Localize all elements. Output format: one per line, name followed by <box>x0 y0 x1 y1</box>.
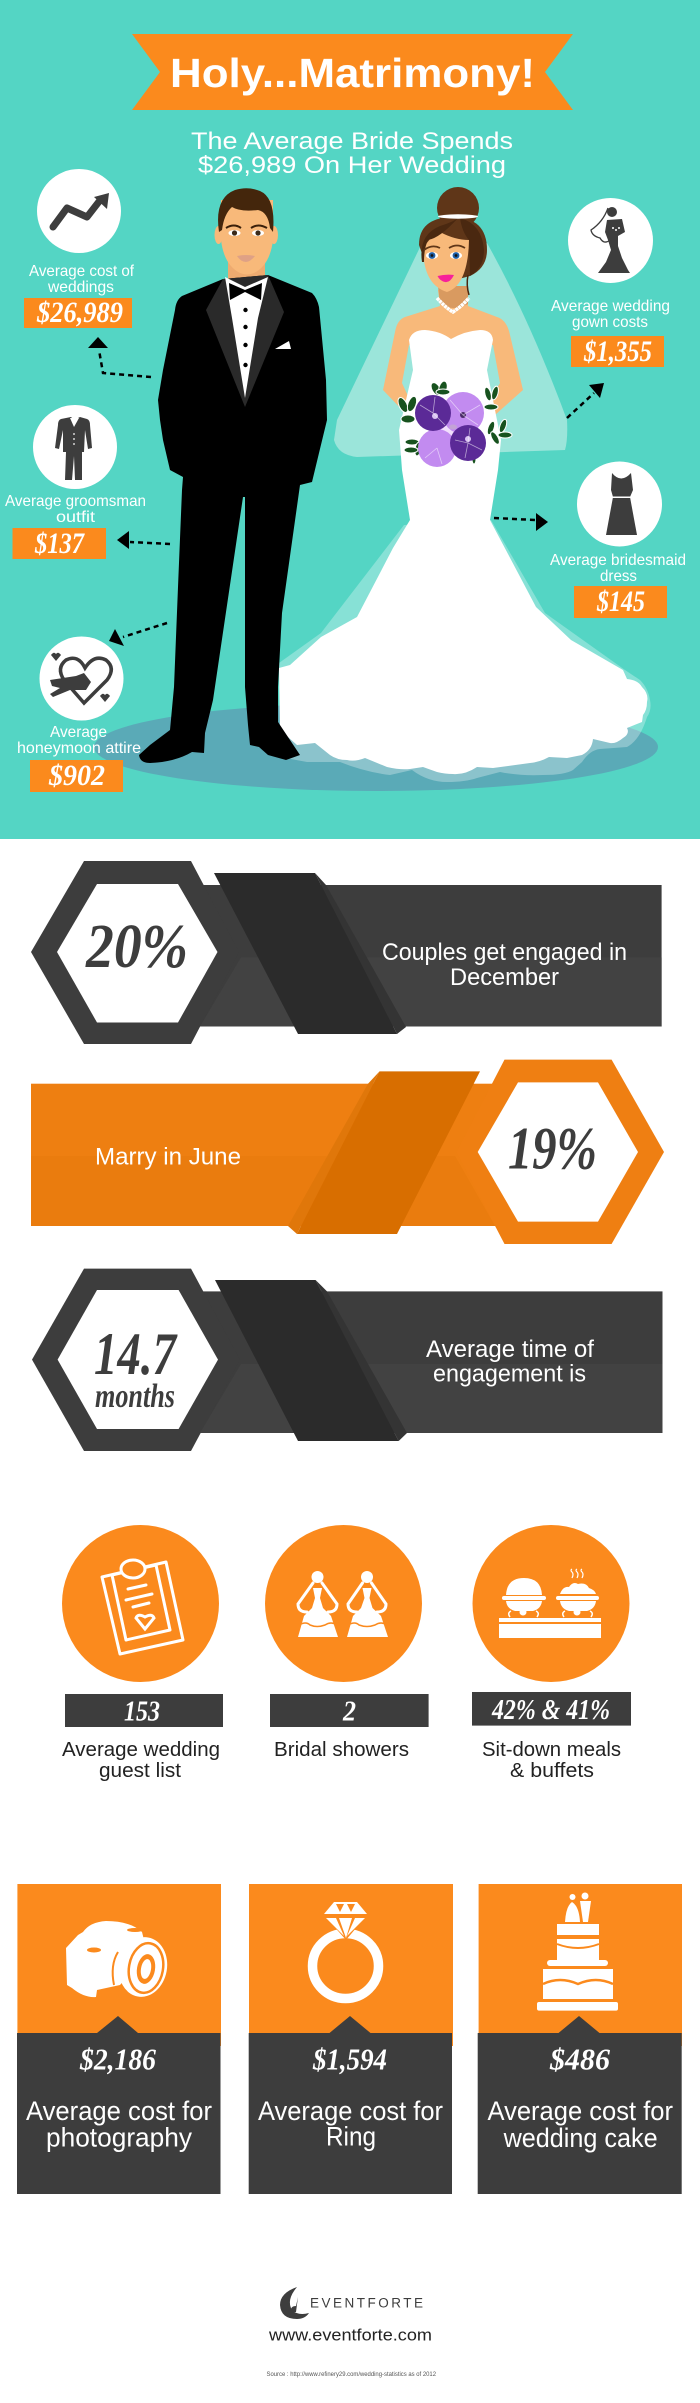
stat: meals and buffets: Sit-down meals <box>482 1739 621 1761</box>
groom lapels <box>206 275 284 407</box>
stat: honeymoon attire <box>17 636 141 792</box>
icon: wedding cake <box>537 1892 618 2011</box>
stat: groomsman outfit: $137 <box>34 527 85 560</box>
stat: guest list: 153 <box>124 1697 160 1728</box>
subtitle: The Average Bride Spends <box>191 128 513 155</box>
card: ring: Ring <box>326 2122 376 2152</box>
icon: diamond ring <box>312 1902 378 1998</box>
card: wedding cake: Average cost for <box>488 2096 673 2126</box>
banner: 19% marry in June: Marry in June <box>95 1144 241 1170</box>
bride necklace <box>437 298 469 312</box>
stat: honeymoon attire: honeymoon attire <box>17 740 141 757</box>
stat: groomsman outfit <box>5 405 146 560</box>
stat: wedding gown: gown costs <box>572 314 648 331</box>
stat: bridal showers <box>265 1525 429 1761</box>
icon: gown <box>568 198 653 283</box>
subtitle <box>191 128 513 179</box>
icon: crescent logo <box>280 2287 309 2319</box>
icon: camera <box>66 1921 172 2001</box>
stat: bridesmaid dress <box>550 462 686 618</box>
arrow: to groomsman cost <box>117 531 170 549</box>
groom pocket square <box>275 341 291 349</box>
bride lower veil <box>279 520 651 782</box>
website link: www.eventforte.com <box>268 2326 432 2345</box>
stat: average cost of weddings: Average cost of <box>29 263 135 280</box>
card: photography: Average cost for <box>26 2096 212 2126</box>
bride face and hair <box>419 187 487 308</box>
icon: two brides <box>265 1525 422 1682</box>
stat: bridal showers: 2 <box>342 1697 356 1728</box>
card: ring: Average cost for <box>258 2096 443 2126</box>
arrow: to honeymoon cost <box>109 623 167 646</box>
footer logo <box>280 2287 423 2319</box>
card: wedding cake: $486 <box>549 2042 610 2076</box>
stat: honeymoon attire: Average <box>50 724 107 741</box>
card: wedding cake: wedding cake <box>503 2123 658 2153</box>
banner: 19% marry in June: 19% <box>508 1116 597 1182</box>
stat: guest list: Average wedding <box>62 1739 220 1761</box>
banner: 19% marry in June <box>31 1060 664 1244</box>
arrow: to bridesmaid cost <box>494 513 548 531</box>
bride upper veil <box>334 243 567 457</box>
card: ring <box>249 1884 453 2194</box>
arrow: to gown cost <box>567 383 604 418</box>
card: photography <box>17 1884 221 2194</box>
bride dress <box>279 330 647 774</box>
card: photography: photography <box>46 2123 192 2153</box>
stat: meals and buffets: & buffets <box>510 1760 594 1782</box>
banner: 20% engaged in December: Couples get engaged in <box>382 939 627 966</box>
banner: 14.7 months engagement: Average time of <box>426 1336 594 1363</box>
icon: dress <box>577 462 662 546</box>
stat: bridal showers: Bridal showers <box>274 1739 409 1761</box>
stat: average cost of weddings: $26,989 <box>36 296 123 329</box>
stat: wedding gown: $1,355 <box>583 335 652 368</box>
stat: average cost of weddings <box>24 169 135 329</box>
bride arms and shoulders <box>383 288 523 415</box>
icon: clipboard <box>62 1525 219 1682</box>
groom studs <box>243 308 248 367</box>
card: photography: $2,186 <box>79 2042 156 2076</box>
stat: honeymoon attire: $902 <box>48 759 105 792</box>
groom head <box>214 188 278 274</box>
icon: trending arrow <box>37 169 121 253</box>
stat: guest list: guest list <box>99 1760 181 1782</box>
banner: 20% engaged in December: 20% <box>85 913 188 981</box>
title ribbon: Holy...Matrimony! <box>170 50 535 96</box>
banner: 20% engaged in December <box>31 861 662 1044</box>
icon: heart and plane <box>40 636 124 720</box>
stat: average cost of weddings: weddings <box>47 279 114 296</box>
icon: tuxedo <box>33 405 117 489</box>
card: wedding cake <box>478 1884 682 2194</box>
illustration: groom <box>139 188 327 763</box>
banner: 14.7 months engagement: engagement is <box>433 1361 586 1388</box>
panel: teal hero <box>0 0 700 839</box>
source note: Source : http://www.refinery29.com/wedding-statistics as of 2012 <box>266 2371 436 2378</box>
subtitle: $26,989 On Her Wedding <box>198 152 506 179</box>
banner: 14.7 months engagement <box>32 1269 662 1451</box>
bouquet <box>396 380 512 467</box>
stat: guest list <box>62 1525 223 1782</box>
stat: bridesmaid dress: dress <box>600 568 637 585</box>
groom suit <box>139 275 327 763</box>
stat: wedding gown <box>551 198 670 368</box>
banner: 14.7 months engagement: months <box>95 1378 175 1415</box>
stat: bridesmaid dress: $145 <box>596 585 645 618</box>
banner: 20% engaged in December: December <box>450 964 559 991</box>
stat: meals and buffets: 42% & 41% <box>491 1695 610 1726</box>
stat: wedding gown: Average wedding <box>551 298 670 315</box>
stat: groomsman outfit: Average groomsman <box>5 493 146 510</box>
illustration: bride <box>279 187 651 782</box>
title ribbon <box>132 34 573 110</box>
card: ring: $1,594 <box>312 2042 387 2076</box>
floor shadow <box>94 703 658 791</box>
arrow: to wedding cost <box>88 337 151 377</box>
icon: serving dishes <box>472 1525 630 1682</box>
stat: bridesmaid dress: Average bridesmaid <box>550 552 686 569</box>
stat: meals and buffets <box>472 1525 631 1782</box>
banner: 14.7 months engagement: 14.7 <box>94 1321 178 1387</box>
footer logo: EVENTFORTE <box>310 2296 423 2311</box>
stat: groomsman outfit: outfit <box>56 509 96 526</box>
groom shirt <box>225 277 268 398</box>
